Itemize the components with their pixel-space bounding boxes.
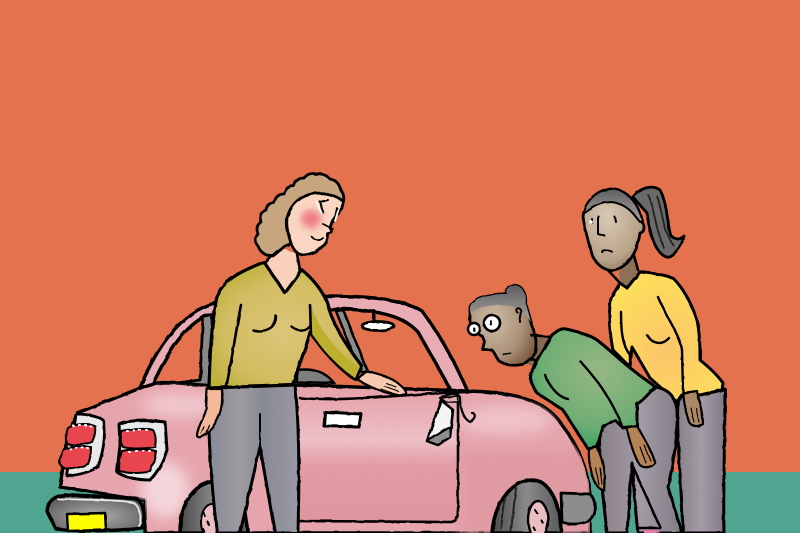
yellow woman ponytail bbox=[633, 187, 684, 257]
background: teal ground bbox=[0, 472, 800, 533]
olive woman neck bbox=[264, 247, 303, 293]
olive woman sweater bbox=[209, 262, 362, 388]
left tail light bbox=[59, 414, 105, 476]
car roof and windshield frame bbox=[140, 296, 468, 392]
license plate bbox=[67, 513, 106, 531]
person: woman in yellow sweater bbox=[583, 187, 725, 533]
olive woman face bbox=[287, 193, 343, 255]
rear side window frame bbox=[153, 315, 212, 394]
front wheel bbox=[492, 480, 561, 533]
yellow woman sweater bbox=[610, 272, 723, 402]
olive woman lowered hand bbox=[197, 389, 222, 437]
car seat seen through window bbox=[296, 370, 334, 383]
car rear view mirror bbox=[362, 311, 394, 330]
green woman neck bbox=[518, 333, 552, 366]
green woman left hand bbox=[589, 447, 605, 490]
car body bbox=[60, 383, 590, 533]
door handle bbox=[324, 412, 361, 427]
olive woman hand on car bbox=[358, 371, 406, 395]
person: woman in olive sweater bbox=[197, 174, 406, 533]
rear wheel bbox=[180, 481, 248, 533]
green woman head bbox=[468, 285, 552, 365]
front bumper bbox=[561, 493, 595, 524]
yellow woman hand bbox=[683, 391, 703, 426]
body highlights bbox=[141, 393, 595, 533]
right tail light bbox=[117, 421, 167, 480]
green woman sweater bbox=[530, 329, 655, 449]
green woman right hand bbox=[627, 426, 655, 467]
olive woman hair bbox=[256, 174, 344, 256]
green woman trousers bbox=[600, 387, 682, 533]
olive woman trousers bbox=[209, 385, 299, 533]
broken side mirror bbox=[427, 394, 475, 445]
illustration: three women inspecting a car with a broken mirror bbox=[0, 172, 800, 533]
yellow woman trousers bbox=[678, 389, 725, 533]
door seam lines bbox=[298, 392, 467, 522]
car bbox=[47, 296, 595, 533]
rear bumper bbox=[47, 495, 144, 531]
door pillar bbox=[336, 310, 368, 372]
person: bending woman in green sweater bbox=[468, 285, 682, 533]
yellow woman head bbox=[583, 189, 644, 270]
yellow woman neck bbox=[606, 252, 638, 288]
